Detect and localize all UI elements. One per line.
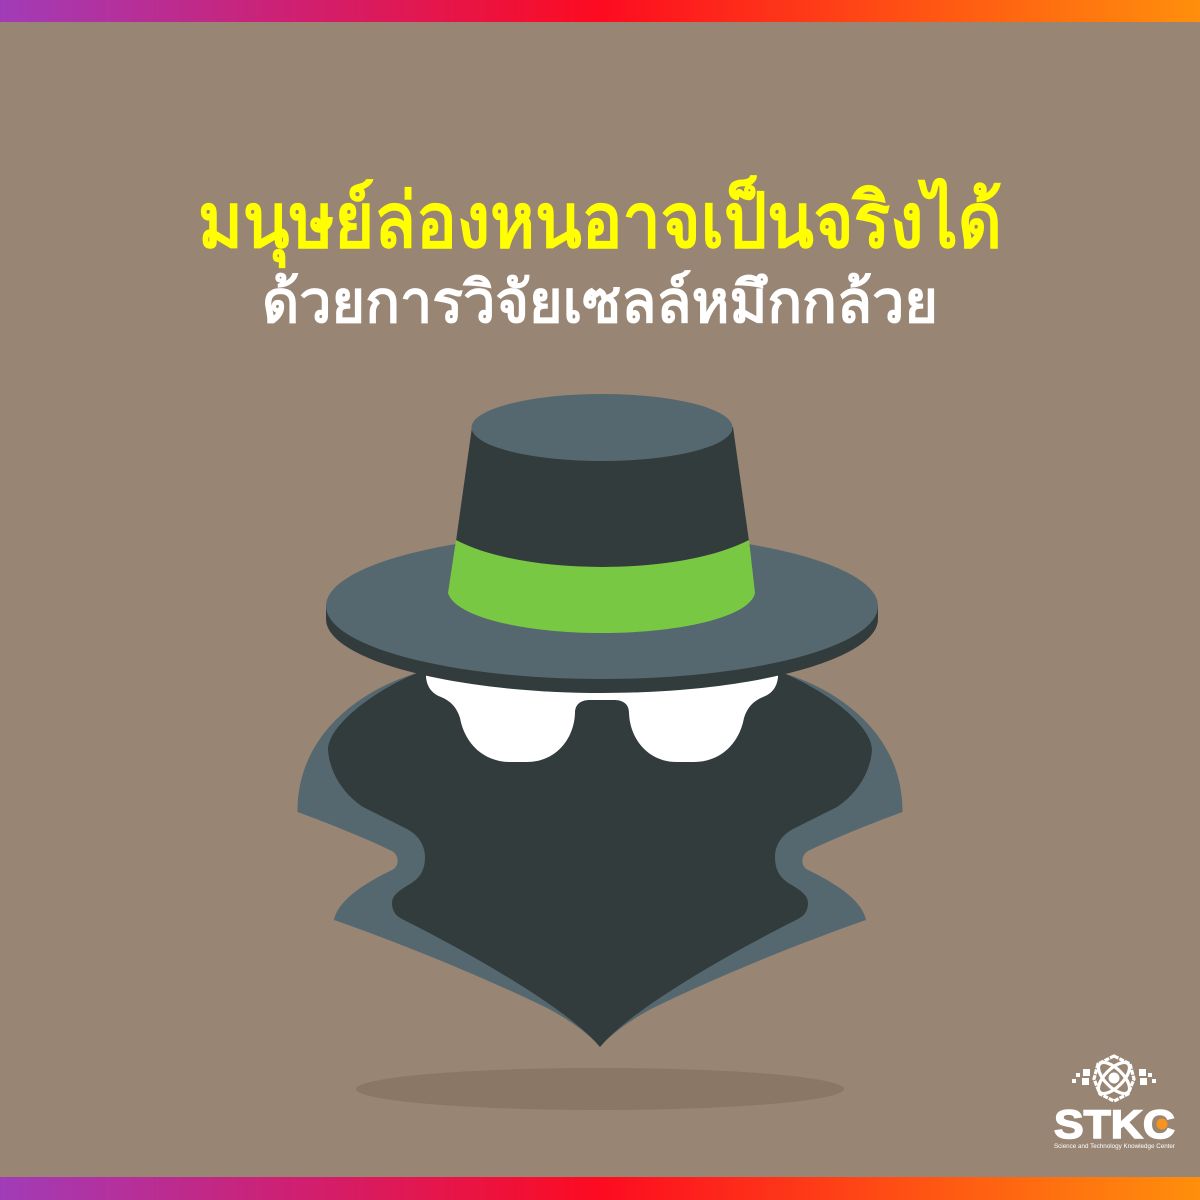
logo pixels right bbox=[1139, 1069, 1156, 1085]
ground shadow bbox=[356, 1068, 844, 1110]
hat top bbox=[472, 394, 732, 461]
brim underside bbox=[326, 606, 878, 693]
title: มนุษย์ล่องหนอาจเป็นจริงได้ bbox=[198, 175, 1002, 269]
crown bbox=[456, 427, 749, 567]
hat band bbox=[448, 540, 755, 633]
spy figure bbox=[297, 394, 903, 1047]
logo orange dot bbox=[1156, 1118, 1168, 1130]
subtitle: ด้วยการวิจัยเซลล์หมึกกล้วย bbox=[262, 269, 938, 335]
logo emblem bbox=[1072, 1056, 1135, 1101]
cloak inner body bbox=[328, 673, 872, 1047]
logo wordmark: STKC bbox=[1054, 1103, 1175, 1147]
cloak outer bbox=[297, 673, 903, 1047]
hat bbox=[326, 394, 878, 693]
bottom gradient bar bbox=[0, 1177, 1200, 1200]
logo tagline: Science and Technology Knowledge Center bbox=[1054, 1144, 1175, 1150]
top gradient bar bbox=[0, 0, 1200, 22]
STKC logo bbox=[1054, 1056, 1175, 1150]
sunglasses bbox=[426, 670, 778, 762]
logo pixels left bbox=[1072, 1069, 1090, 1085]
brim top bbox=[326, 533, 878, 679]
